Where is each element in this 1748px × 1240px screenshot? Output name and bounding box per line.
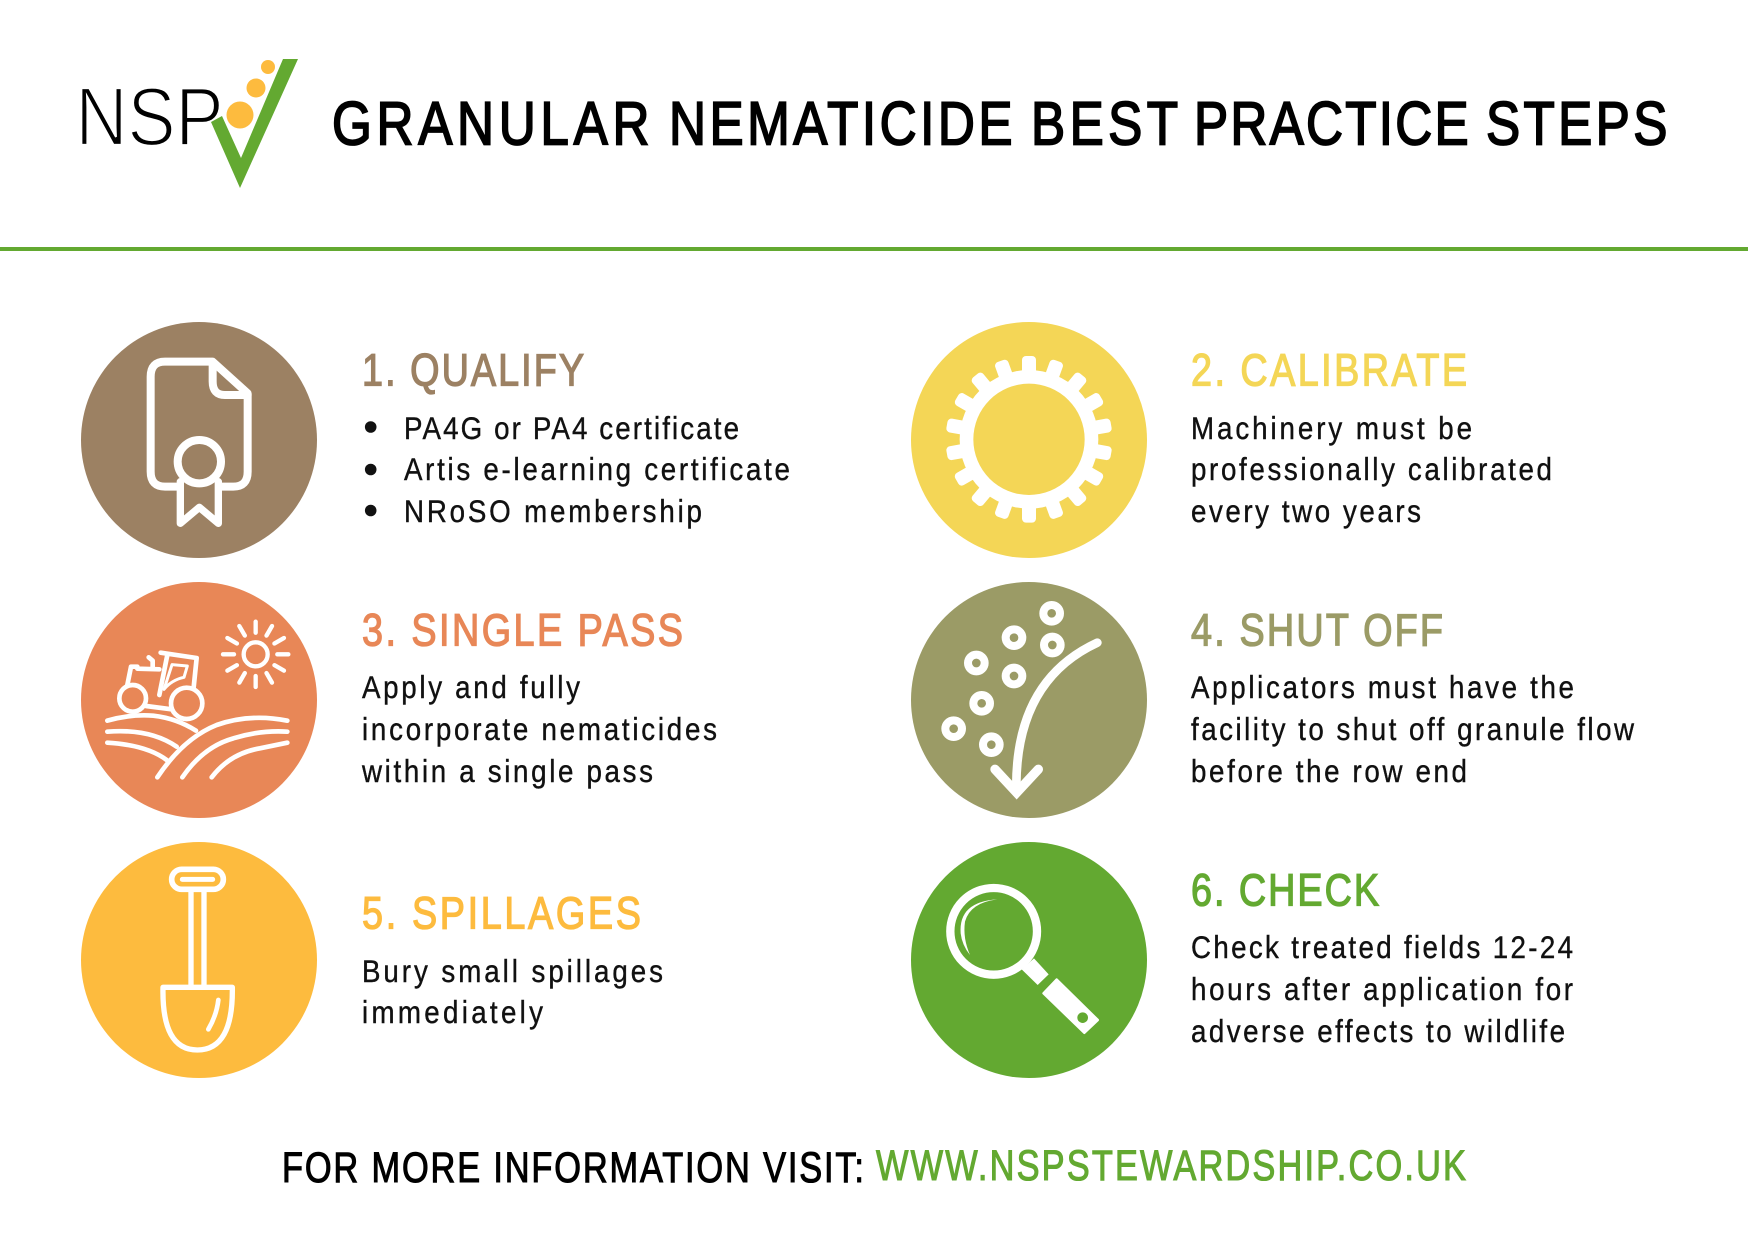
body text: incorporate nematicides [362,712,717,747]
logo wordmark: NSP [76,70,224,163]
icon: tractor in field [81,582,317,818]
body text: before the row end [1191,754,1467,789]
bullet list: Artis e-learning certificate [404,452,790,487]
bullet list: NRoSO membership [404,494,702,529]
footer call to action [282,1142,1466,1192]
step 4: shut off [911,582,1635,818]
body text: hours after application for [1191,972,1573,1007]
footer label: FOR MORE INFORMATION VISIT: [282,1144,864,1192]
logo: NSP with tick [76,59,298,188]
body text [1191,411,1552,529]
title: GRANULAR [332,89,649,157]
title: NEMATICIDE [669,89,1013,157]
heading: qualify: 1. QUALIFY [362,344,584,395]
body text: Machinery must be [1191,411,1472,446]
step 6: check [911,842,1573,1078]
body text: adverse effects to wildlife [1191,1014,1565,1049]
body text: facility to shut off granule flow [1191,712,1635,747]
logo granules [226,60,275,128]
icon: spade [81,842,317,1078]
body text: Apply and fully [362,670,580,705]
heading: single pass: 3. SINGLE PASS [362,604,683,655]
heading: check: 6. CHECK [1191,864,1379,915]
logo tick [211,59,298,188]
step 2: calibrate [911,322,1552,558]
body text [1191,930,1573,1049]
icon: granules and arrow [911,582,1147,818]
body text: Bury small spillages [362,954,663,989]
heading: shut off: 4. SHUT OFF [1191,604,1443,655]
icon: magnifying glass [911,842,1147,1078]
body text [362,954,663,1030]
title [332,89,1667,157]
body text [1191,670,1635,789]
title: BEST [1031,89,1178,157]
heading: spillages: 5. SPILLAGES [362,887,641,938]
body text: within a single pass [361,754,653,789]
heading: calibrate: 2. CALIBRATE [1191,344,1467,395]
bullet list: PA4G or PA4 certificate [404,411,739,446]
body text: every two years [1191,494,1421,529]
body text: immediately [362,995,543,1030]
body text: Applicators must have the [1191,670,1574,705]
body text: Check treated fields 12-24 [1191,930,1573,965]
step 3: single pass [81,582,717,818]
title: STEPS [1486,89,1667,157]
step 5: spillages [81,842,663,1078]
title: PRACTICE [1194,89,1469,157]
icon: certificate [81,322,317,558]
icon: gear [911,322,1147,558]
footer website: WWW.NSPSTEWARDSHIP.CO.UK [876,1142,1466,1190]
step 1: qualify [81,322,790,558]
body text [361,670,717,789]
body text: professionally calibrated [1191,452,1552,487]
bullet list [365,411,790,529]
